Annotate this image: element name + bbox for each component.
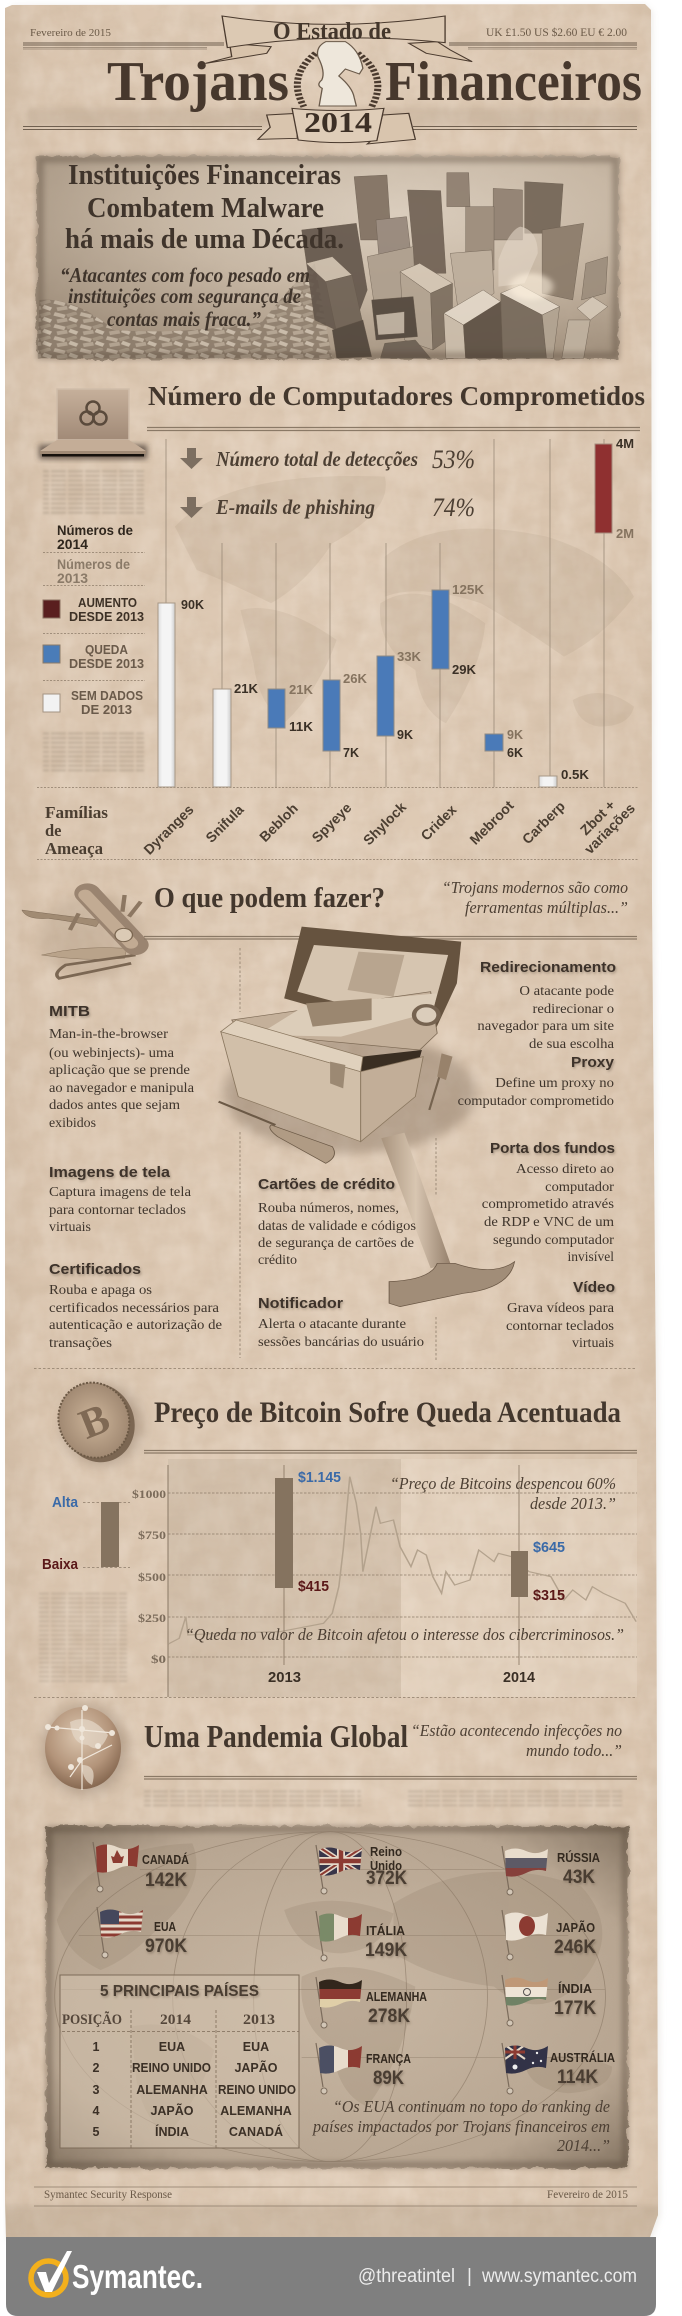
label: United Kingdom: [366, 1844, 407, 1889]
hero city illustration: [38, 173, 608, 358]
label: Germany: [366, 1989, 427, 2027]
heading: what they can do: O que podem fazer?: [154, 882, 385, 914]
masthead title right: Financeiros: [385, 51, 642, 113]
bar: Bebloh: 11K: [289, 719, 314, 734]
label: Australia: 114K: [557, 2067, 598, 2088]
family names: [140, 797, 638, 858]
map panel: [46, 1826, 628, 2168]
feature: certificates: Certificados: [49, 1261, 141, 1278]
quote: infections: mundo todo...”: [526, 1741, 622, 1760]
illustration: toolbox with hammer: [219, 927, 515, 1307]
paper footer strip: Symantec Security Response: [44, 2187, 172, 2201]
legend: [43, 523, 145, 717]
bar: Carberp: [539, 767, 590, 787]
feature: MITB: (ou webinjects)- uma: [49, 1046, 175, 1061]
bar: Mebroot: 6K: [507, 745, 524, 760]
bar: Spyeye: 7K: [343, 745, 360, 760]
label: Russia: RÚSSIA: [557, 1850, 601, 1865]
feature: backdoor: invisível: [568, 1250, 614, 1265]
axis labels: $500: [138, 1570, 166, 1584]
label: USA: EUA: [154, 1919, 176, 1934]
feature: proxy: Define um proxy no: [495, 1076, 614, 1091]
quote: infections: [411, 1721, 622, 1760]
flag: India: [502, 1975, 549, 2026]
feature: screenshots: virtuais: [49, 1220, 91, 1235]
table header: 2013: [243, 2012, 275, 2028]
label: Germany: ALEMANHA: [366, 1989, 427, 2004]
quote: infections: “Estão acontecendo infecções no: [411, 1721, 622, 1740]
legend: high low bar: [42, 1494, 130, 1573]
table header: [62, 2010, 275, 2028]
stat: phishing: [215, 493, 475, 522]
legend: no data: SEM DADOS: [71, 688, 143, 703]
feature: redirect: navegador para um site: [477, 1019, 614, 1034]
icon: multi-tool knife: [22, 893, 144, 978]
label: Italy: ITÁLIA: [366, 1923, 406, 1938]
quote: price drop: “Preço de Bitcoins despencou 60%: [390, 1474, 616, 1493]
icon: globe: [43, 1705, 127, 1794]
axis label: threat families: [45, 803, 109, 858]
hero heading: Instituições Financeiras: [68, 160, 341, 191]
label: India: ÍNDIA: [558, 1981, 593, 1996]
icon: bitcoin coin: [47, 1368, 154, 1477]
feature: redirect: Redirecionamento: [480, 959, 616, 976]
feature: notifier: Notificador: [258, 1295, 343, 1312]
banner: 2014: [258, 108, 415, 144]
hero quote: contas mais fraca.”: [107, 307, 261, 331]
feature: backdoor: Acesso direto ao: [516, 1162, 614, 1177]
hero panel: [37, 156, 619, 359]
bar: Cridex: [432, 582, 485, 677]
label: Japan: JAPÃO: [556, 1920, 595, 1935]
bar: Bebloh: 21K: [289, 682, 314, 697]
legend: high low bar: Baixa: [42, 1556, 79, 1573]
feature: proxy: computador comprometido: [458, 1094, 614, 1109]
axis labels: $750: [138, 1528, 166, 1542]
hero quote: “Atacantes com foco pesado em: [60, 263, 310, 287]
legend: no data: DE 2013: [81, 702, 132, 717]
panel: bitcoin price: [34, 1368, 637, 1698]
bar: Bebloh: [268, 682, 314, 734]
panel: compromised computers: [37, 381, 645, 860]
flag: Japan: [502, 1910, 549, 1960]
world map background: [175, 476, 634, 727]
family names: Spyeye: [308, 799, 355, 845]
axis labels: $0: [151, 1652, 166, 1666]
table rows: EUA: [243, 2040, 269, 2054]
table rows: JAPÃO: [150, 2103, 194, 2118]
bar: Dyranges: 90K: [181, 597, 205, 612]
feature: backdoor: de RDP e VNC de um: [484, 1215, 614, 1230]
feature: MITB: MITB: [49, 1003, 90, 1020]
range bar chart: [37, 436, 639, 860]
label: France: FRANÇA: [366, 2051, 411, 2066]
quote: price drop: [390, 1474, 616, 1513]
bar: Zbot: 4M: [616, 436, 634, 451]
feature: certificates: transações: [49, 1336, 112, 1351]
bar: Cridex: 125K: [452, 582, 485, 597]
hero heading: [65, 160, 344, 255]
icon: wreath: [297, 53, 378, 107]
hero heading: Combatem Malware: [87, 193, 324, 224]
legend: Números de: [57, 557, 130, 572]
legend: decrease: [43, 642, 144, 671]
hero heading: há mais de uma Década.: [65, 224, 344, 255]
quote: USA on top: [312, 2097, 610, 2155]
quote: multitools: “Trojans modernos são como: [442, 878, 628, 897]
feature: MITB: [49, 1003, 195, 1131]
family names: Shylock: [360, 799, 409, 848]
hero quote: [60, 263, 310, 331]
table rows: CANADÁ: [229, 2124, 283, 2139]
range bar 2013: $415: [298, 1578, 329, 1595]
range bar 2013: $1.145: [298, 1469, 341, 1486]
bar: Snifula: 21K: [234, 681, 259, 696]
legend: high low bar: Alta: [52, 1494, 79, 1511]
axis label: threat families: Famílias: [45, 803, 109, 822]
table rows: ALEMANHA: [220, 2104, 292, 2118]
label: India: 177K: [554, 1998, 596, 2019]
masthead prices: UK £1.50 US $2.60 EU € 2.00: [486, 26, 627, 39]
legend: 2014: [57, 537, 88, 552]
feature: MITB: exibidos: [49, 1116, 96, 1131]
masthead subtitle: O Estado de: [273, 19, 391, 45]
masthead title left: Trojans: [107, 51, 289, 113]
table rows: 1: [93, 2040, 100, 2054]
feature: backdoor: segundo computador: [493, 1233, 614, 1248]
bar: Zbot: 2M: [616, 526, 634, 541]
table rows: REINO UNIDO: [218, 2083, 296, 2097]
label: United Kingdom: 372K: [366, 1868, 407, 1889]
feature: credit cards: Cartões de crédito: [258, 1176, 395, 1193]
table title: 5 PRINCIPAIS PAÍSES: [100, 1981, 259, 2000]
masthead date: Fevereiro de 2015: [30, 27, 112, 39]
range bar 2014: 2014: [503, 1669, 536, 1686]
legend: increase: [43, 595, 144, 624]
panel: what they can do: [22, 878, 637, 1368]
bar: Spyeye: [323, 671, 368, 760]
family names: Cridex: [417, 801, 460, 844]
feature: credit cards: de segurança de cartões de: [258, 1236, 414, 1251]
icon: laptop with biohazard: [39, 389, 147, 459]
bar: Zbot: [595, 436, 634, 541]
family names: Snifula: [202, 801, 247, 846]
flag: United Kingdom: [316, 1845, 363, 1894]
feature: redirect: de sua escolha: [529, 1037, 615, 1052]
flag: Germany: [316, 1977, 363, 2028]
bar: Shylock: [377, 649, 422, 742]
feature: MITB: ao navegador e manipula: [49, 1081, 195, 1096]
footer links: |: [467, 2266, 472, 2287]
feature: MITB: dados antes que sejam: [49, 1098, 180, 1113]
quote: interest: “Queda no valor de Bitcoin afetou o interesse dos cibercriminosos.”: [185, 1625, 624, 1644]
label: Italy: 149K: [365, 1940, 407, 1961]
stat: detections: Número total de detecções: [215, 447, 418, 471]
feature: notifier: sessões bancárias do usuário: [258, 1335, 424, 1350]
quote: multitools: ferramentas múltiplas...”: [465, 898, 628, 917]
quote: price drop: desde 2013.”: [530, 1494, 616, 1513]
table rows: [93, 2040, 296, 2139]
footer links: @threatintel: [358, 2266, 455, 2287]
label: Russia: 43K: [563, 1867, 595, 1888]
family names: Dyranges: [140, 801, 197, 858]
feature: proxy: Proxy: [571, 1054, 615, 1071]
label: Canada: [142, 1852, 189, 1891]
legend: increase: AUMENTO: [78, 595, 137, 610]
table rows: ÍNDIA: [155, 2124, 189, 2139]
masthead: [23, 16, 642, 144]
label: France: [366, 2051, 411, 2089]
bar: Mebroot: 9K: [507, 727, 524, 742]
banner year: 2014: [304, 107, 372, 139]
flag: Russia: [502, 1846, 549, 1895]
bar: Spyeye: 26K: [343, 671, 368, 686]
table rows: ALEMANHA: [136, 2083, 208, 2097]
table rows: EUA: [159, 2040, 185, 2054]
legend: Números de: [57, 523, 133, 538]
bitcoin price line: [168, 1477, 636, 1644]
feature: certificates: certificados necessários para: [49, 1301, 220, 1316]
banner: O Estado de: [205, 16, 472, 63]
hero vignette: [40, 159, 616, 356]
icon: chess knight: [317, 42, 363, 106]
feature: notifier: [258, 1295, 424, 1350]
feature: video: Grava vídeos para: [507, 1301, 615, 1316]
label: Japan: 246K: [554, 1937, 596, 1958]
feature: certificates: Rouba e apaga os: [49, 1283, 152, 1298]
label: India: [554, 1981, 596, 2019]
family names: Carberp: [519, 798, 568, 847]
line and range chart: [132, 1459, 637, 1697]
heading: bitcoin: Preço de Bitcoin Sofre Queda Acentuada: [154, 1396, 621, 1429]
logo wordmark: Symantec.: [72, 2258, 203, 2295]
table rows: 2: [93, 2061, 100, 2075]
label: Japan: [554, 1920, 596, 1958]
label: Russia: [557, 1850, 601, 1888]
bar: Snifula: [213, 681, 259, 787]
feature: screenshots: para contornar teclados: [49, 1203, 186, 1218]
axis label: threat families: Ameaça: [45, 839, 103, 858]
paper footer strip: Fevereiro de 2015: [547, 2187, 628, 2201]
heading: pandemic: Uma Pandemia Global: [144, 1718, 408, 1754]
flag: USA: [97, 1907, 144, 1958]
table rows: JAPÃO: [234, 2060, 278, 2075]
range bar 2014: $645: [533, 1539, 565, 1556]
legend: no data: [43, 688, 143, 717]
feature: screenshots: Imagens de tela: [49, 1164, 171, 1181]
hero quote: instituições com segurança de: [68, 284, 301, 308]
feature: backdoor: comprometido através: [482, 1197, 614, 1212]
table rows: 4: [93, 2104, 100, 2118]
legend: increase: DESDE 2013: [69, 609, 144, 624]
bar: Shylock: 9K: [397, 727, 414, 742]
legend: 2013: [57, 571, 88, 586]
family names: Mebroot: [466, 797, 517, 848]
feature: screenshots: Captura imagens de tela: [49, 1185, 192, 1200]
feature: credit cards: [258, 1176, 416, 1268]
feature: credit cards: crédito: [258, 1253, 297, 1268]
label: Canada: 142K: [145, 1870, 187, 1891]
stat: phishing: E-mails de phishing: [215, 495, 375, 519]
footer bar: [6, 2237, 656, 2316]
axis labels: [132, 1487, 166, 1666]
feature: redirect: redirecionar o: [532, 1002, 614, 1017]
label: USA: [145, 1919, 187, 1957]
range bar 2014: [503, 1539, 565, 1686]
footer links: [358, 2266, 637, 2287]
axis labels: $250: [138, 1611, 166, 1625]
label: Italy: [365, 1923, 407, 1961]
family names: Bebloh: [256, 800, 301, 845]
feature: credit cards: Rouba números, nomes,: [258, 1201, 399, 1216]
feature: certificates: autenticação e autorização de: [49, 1318, 222, 1333]
feature: video: contornar teclados: [506, 1319, 614, 1334]
feature: notifier: Alerta o atacante durante: [258, 1317, 406, 1332]
feature: backdoor: Porta dos fundos: [490, 1140, 615, 1157]
quote: multitools: [442, 878, 628, 917]
bar: Dyranges: [158, 597, 205, 787]
feature: screenshots: [49, 1164, 192, 1235]
axis label: threat families: de: [45, 821, 62, 840]
feature: credit cards: datas de validade e códigos: [258, 1219, 416, 1234]
range bar 2014: $315: [533, 1587, 565, 1604]
bar: Mebroot: [485, 727, 524, 760]
label: Germany: 278K: [368, 2006, 410, 2027]
table rows: REINO UNIDO: [132, 2061, 211, 2075]
feature: MITB: Man-in-the-browser: [49, 1027, 168, 1042]
feature: backdoor: computador: [545, 1180, 614, 1195]
label: Canada: CANADÁ: [142, 1852, 189, 1867]
flag: Canada: [93, 1842, 140, 1892]
bar: Cridex: 29K: [452, 662, 477, 677]
table header: POSIÇÃO: [62, 2010, 122, 2028]
legend: decrease: DESDE 2013: [69, 656, 144, 671]
table header: 2014: [160, 2012, 192, 2028]
feature: backdoor: [482, 1140, 615, 1265]
heading: computers: Número de Computadores Comprometidos: [148, 381, 645, 411]
footer links: www.symantec.com: [481, 2266, 637, 2287]
label: USA: 970K: [145, 1936, 187, 1957]
bar: Shylock: 33K: [397, 649, 422, 664]
world map: [55, 1832, 612, 2162]
flag: France: [316, 2043, 363, 2094]
feature: video: [506, 1279, 615, 1351]
stat: detections: 53%: [432, 445, 475, 474]
label: United Kingdom: Reino: [370, 1844, 402, 1859]
paper footer strip: [34, 2187, 637, 2206]
feature: video: Vídeo: [573, 1279, 615, 1296]
feature: video: virtuais: [572, 1336, 614, 1351]
quote: USA on top: 2014...”: [557, 2136, 610, 2155]
feature: certificates: [49, 1261, 222, 1351]
label: United Kingdom: Unido: [370, 1858, 402, 1873]
icon: down arrow: [180, 497, 203, 518]
quote: USA on top: países impactados por Trojans financeiros em: [312, 2117, 610, 2136]
feature: proxy: [458, 1054, 615, 1109]
table: top 5 countries: [60, 1975, 299, 2148]
range bar 2013: [268, 1469, 341, 1686]
quote: USA on top: “Os EUA continuam no topo do ranking de: [333, 2097, 610, 2116]
table rows: 5: [93, 2125, 100, 2139]
axis labels: $1000: [132, 1487, 166, 1501]
label: Australia: AUSTRÁLIA: [550, 2050, 616, 2065]
family names: variações: [581, 800, 638, 857]
range bar 2013: 2013: [268, 1669, 301, 1686]
stat: phishing: 74%: [432, 493, 475, 522]
table rows: 3: [93, 2083, 100, 2097]
icon: bitcoin coin: B: [73, 1395, 116, 1449]
panel: global pandemic: [43, 1705, 637, 2168]
legend: decrease: QUEDA: [85, 642, 129, 657]
flag: Italy: [316, 1911, 363, 1961]
label: France: 89K: [373, 2068, 404, 2089]
flag: Australia: [502, 2043, 549, 2094]
logo: Symantec check: [31, 2251, 72, 2295]
feature: MITB: aplicação que se prende: [49, 1063, 190, 1078]
icon: down arrow: [180, 448, 203, 469]
label: Australia: [550, 2050, 616, 2088]
feature: redirect: O atacante pode: [519, 984, 614, 999]
feature: redirect: [477, 959, 616, 1052]
family names: Zbot +: [577, 797, 618, 838]
bar: Carberp: 0.5K: [561, 767, 590, 782]
